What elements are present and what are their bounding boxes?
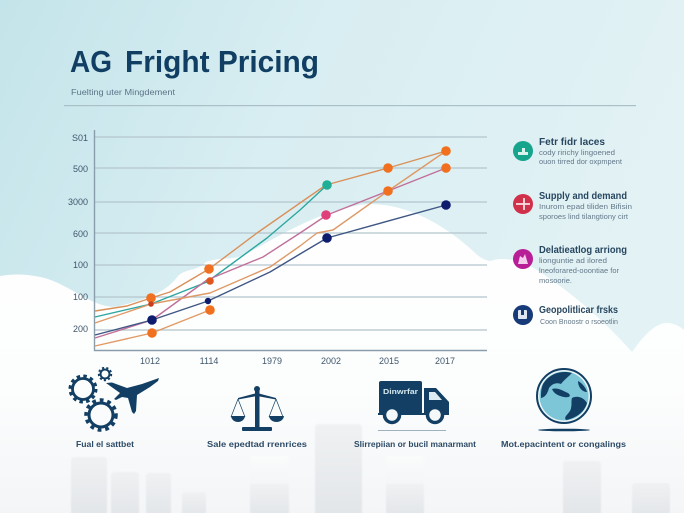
x axis labels: 2015 [379, 356, 399, 366]
factor: deregulation: Delatieatlog arriong [539, 245, 627, 256]
factor: fuel: cody ririchy lingoened [539, 148, 615, 157]
factor: supply and demand: Inurom epad tiliden Bifisin [539, 202, 632, 211]
factor: geopolitical risks [513, 305, 618, 326]
title: AG [70, 45, 112, 79]
x axis labels: 1114 [200, 356, 218, 366]
background clouds [0, 204, 684, 513]
icon: globe [537, 369, 591, 423]
icon: gears and plane [70, 368, 159, 430]
y axis labels: 3000 [68, 197, 88, 207]
factor: supply and demand: Supply and demand [539, 191, 627, 202]
icon: teal badge [513, 141, 533, 161]
label: Fual el sattbet [76, 439, 134, 449]
label: Sale epedtad rrenrices [207, 439, 307, 449]
item: globe icon group [501, 369, 626, 449]
y axis labels: 100 [73, 292, 88, 302]
title: Fright Pricing [125, 45, 319, 79]
factor: supply and demand: sporoes lind tilangtiony cirt [539, 212, 628, 221]
icon: magenta badge [513, 249, 533, 269]
y axis labels: 500 [73, 164, 88, 174]
x axis labels [140, 356, 455, 366]
y axis labels: 200 [73, 324, 88, 334]
factor: deregulation: mosoorie. [539, 276, 572, 285]
factor: geopolitical risks: Coon Bnoostr o rsoeotlin [540, 317, 618, 326]
factor: fuel: Fetr fidr laces [539, 137, 605, 148]
subtitle: Fuelting uter Mingdement [71, 87, 176, 97]
y axis labels [68, 133, 88, 334]
y axis labels: 100 [73, 260, 88, 270]
shadow [538, 429, 590, 431]
factor: geopolitical risks: Geopolitlicar frsks [539, 305, 618, 316]
icon: navy badge [513, 305, 533, 325]
factor: fuel [513, 137, 622, 166]
label: Slirrepiian or bucil manarmant [354, 439, 476, 449]
factor: supply and demand [513, 191, 632, 221]
item: scale icon group [207, 386, 307, 449]
series markers [146, 146, 451, 338]
shadow [378, 430, 446, 431]
item: truck icon group [354, 381, 476, 449]
x axis labels: 1012 [140, 356, 160, 366]
line chart [68, 130, 487, 366]
label: Mot.epacintent or congalings [501, 439, 626, 449]
factor: deregulation: lionguntie ad ilored [539, 256, 607, 265]
item: fuel icon group [70, 368, 159, 449]
factor: deregulation [513, 245, 627, 285]
icon: red badge [513, 194, 533, 214]
x axis labels: 2017 [435, 356, 455, 366]
background bars [71, 424, 670, 513]
icon: balance scale [231, 386, 284, 431]
series lines [95, 151, 446, 346]
header rule [64, 105, 636, 106]
x axis labels: 2002 [321, 356, 341, 366]
factor: deregulation: lneoforared-ooontiae for [539, 266, 620, 275]
icon: delivery truck: Dinwrfar [383, 387, 418, 396]
x axis labels: 1979 [262, 356, 282, 366]
factor: fuel: ouon tirred dor oxpmpent [539, 157, 622, 166]
axes [94, 130, 487, 350]
y axis labels: S01 [72, 133, 88, 143]
y axis labels: 600 [73, 229, 88, 239]
